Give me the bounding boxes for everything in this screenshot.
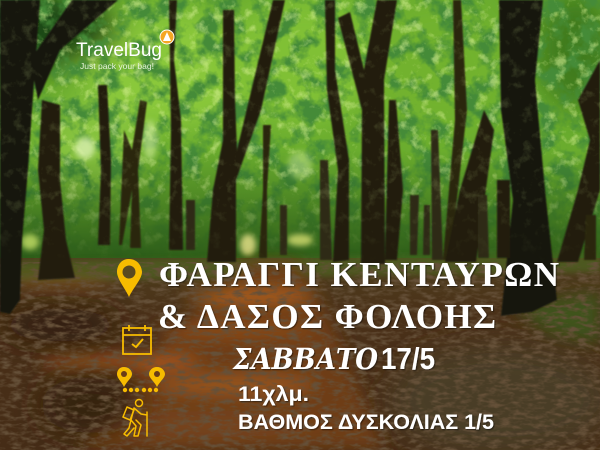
difficulty text: ΒΑΘΜΟΣ ΔΥΣΚΟΛΙΑΣ 1/5 xyxy=(238,411,494,434)
logo name: TravelBug xyxy=(76,40,162,61)
date xyxy=(232,341,435,376)
title xyxy=(158,255,559,336)
icon: calendar xyxy=(123,325,151,354)
background photo: foliage in front of trunks xyxy=(0,0,600,265)
icon: hiker xyxy=(123,400,147,436)
icon: location pin xyxy=(117,259,142,297)
logo badge xyxy=(160,30,174,44)
icon: route between two pins xyxy=(117,367,165,392)
logo tagline: Just pack your bag! xyxy=(80,61,154,71)
background photo: forest canopy xyxy=(0,0,600,270)
logo: TravelBug xyxy=(76,30,174,71)
distance text: 11χλμ. xyxy=(238,383,309,406)
background photo: tree trunks xyxy=(0,0,600,316)
date weekday: ΣΑΒΒΑΤΟ xyxy=(232,342,378,376)
background photo: forest floor and sunlit path xyxy=(0,252,600,450)
date number: 17/5 xyxy=(381,341,435,376)
title line 1: ΦΑΡΑΓΓΙ ΚΕΝΤΑΥΡΩΝ xyxy=(159,255,559,294)
title line 2: & ΔΑΣΟΣ ΦΟΛΟΗΣ xyxy=(158,297,496,336)
